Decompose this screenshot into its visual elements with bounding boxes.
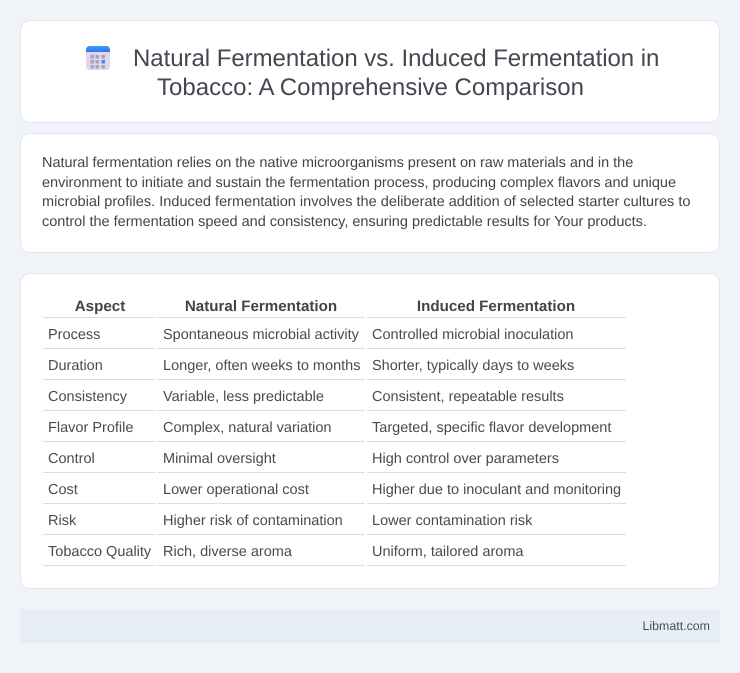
text: Spontaneous microbial activity	[163, 327, 359, 343]
table header: Aspect: Aspect	[75, 298, 125, 315]
text: Uniform, tailored aroma	[372, 544, 524, 560]
row: Process: Process	[48, 327, 100, 343]
text: Variable, less predictable	[163, 389, 324, 405]
text: Targeted, specific flavor development	[372, 420, 611, 436]
text: Controlled microbial inoculation	[372, 327, 574, 343]
title line 1: Natural Fermentation vs. Induced Fermentation in	[133, 45, 659, 72]
intro text line 1: Natural fermentation relies on the native microorganisms present on raw materials and in the	[42, 155, 633, 171]
text: Longer, often weeks to months	[163, 358, 360, 374]
row: Duration: Duration	[48, 358, 103, 374]
panel: comparison table card	[20, 273, 720, 589]
panel: introduction card	[20, 133, 720, 253]
text: Shorter, typically days to weeks	[372, 358, 574, 374]
row: Flavor Profile: Flavor Profile	[48, 420, 133, 436]
text: Lower contamination risk	[372, 513, 532, 529]
row: Tobacco Quality: Tobacco Quality	[48, 544, 151, 560]
table header: Induced Fermentation: Induced Fermentation	[417, 298, 575, 315]
intro text line 3: microbial profiles. Induced fermentation involves the deliberate addition of selected starter cultures to	[42, 194, 691, 210]
intro text line 4: control the fermentation speed and consistency, ensuring predictable results for Your products.	[42, 214, 647, 230]
row: Control: Control	[48, 451, 95, 467]
text: Minimal oversight	[163, 451, 276, 467]
row: Risk: Risk	[48, 513, 76, 529]
text: Higher due to inoculant and monitoring	[372, 482, 621, 498]
intro text line 2: environment to initiate and sustain the fermentation process, producing complex flavors and unique	[42, 175, 676, 191]
text: High control over parameters	[372, 451, 559, 467]
text: Complex, natural variation	[163, 420, 331, 436]
table header: Natural Fermentation: Natural Fermentation	[185, 298, 337, 315]
title line 2: Tobacco: A Comprehensive Comparison	[157, 74, 584, 101]
row: Cost: Cost	[48, 482, 78, 498]
text: Consistent, repeatable results	[372, 389, 564, 405]
icon: calendar	[86, 46, 110, 70]
footer bar	[20, 609, 720, 643]
text: Lower operational cost	[163, 482, 309, 498]
row: Consistency: Consistency	[48, 389, 127, 405]
footer text: Libmatt.com	[643, 619, 710, 633]
panel: title card	[20, 20, 720, 123]
text: Higher risk of contamination	[163, 513, 343, 529]
text: Rich, diverse aroma	[163, 544, 292, 560]
